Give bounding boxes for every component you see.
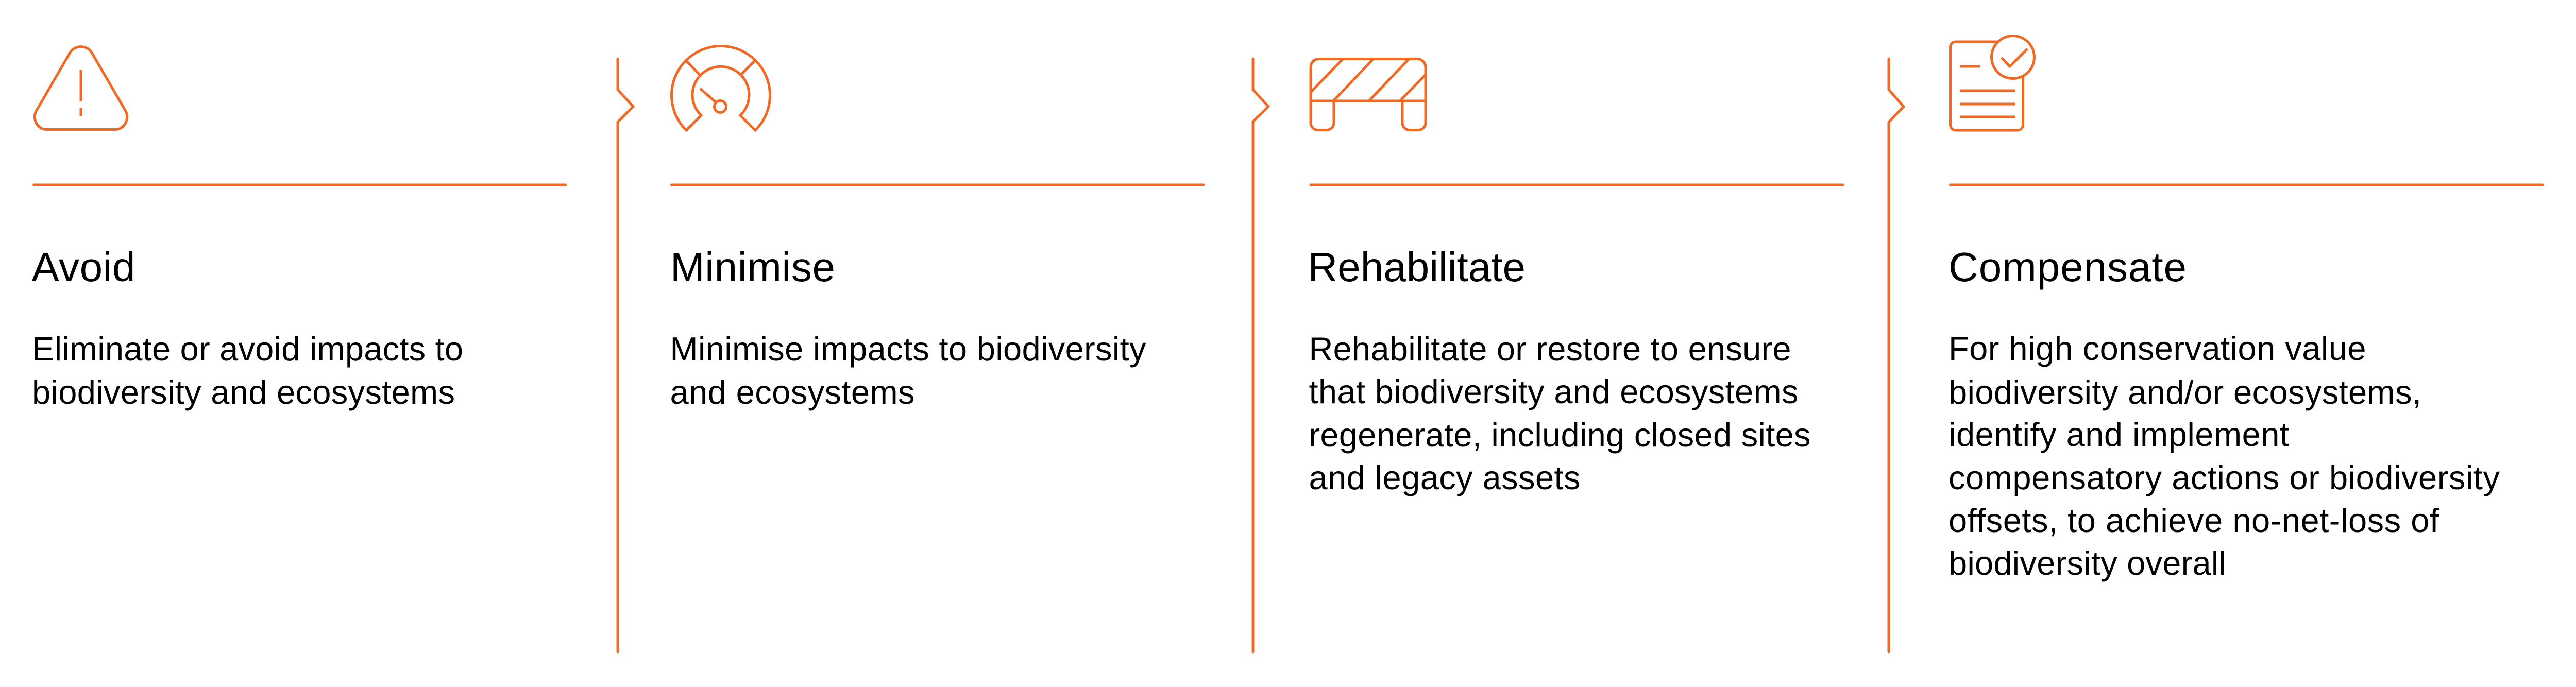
text: Minimise description: and ecosystems bbox=[670, 373, 915, 411]
text: Rehabilitate description: regenerate, including closed sites bbox=[1309, 416, 1810, 454]
icon: warning triangle bbox=[35, 47, 127, 130]
text: Compensate description: For high conservation value bbox=[1948, 330, 2366, 367]
rule: Avoid bbox=[34, 183, 566, 186]
text: Rehabilitate description bbox=[1309, 330, 1810, 496]
text: Compensate description: compensatory actions or biodiversity bbox=[1948, 459, 2500, 496]
text: Rehabilitate description: that biodiversity and ecosystems bbox=[1309, 373, 1798, 410]
arrow: divider 1 bbox=[618, 59, 633, 652]
heading: Minimise: Minimise bbox=[670, 244, 835, 290]
text: Compensate description: offsets, to achieve no-net-loss of bbox=[1948, 502, 2439, 539]
icon: document with check mark bbox=[1951, 36, 2034, 130]
text: Minimise description bbox=[670, 330, 1146, 411]
arrow: divider 3 bbox=[1889, 59, 1904, 652]
text: Avoid description: Eliminate or avoid impacts to bbox=[32, 330, 463, 368]
text: Minimise description: Minimise impacts to biodiversity bbox=[670, 330, 1146, 368]
text: Compensate description: biodiversity and/or ecosystems, bbox=[1948, 373, 2421, 411]
rule: Compensate bbox=[1951, 183, 2543, 186]
heading: Avoid: Avoid bbox=[32, 244, 135, 290]
arrow: divider 2 bbox=[1253, 59, 1268, 652]
text: Compensate description bbox=[1948, 330, 2500, 582]
panel: Rehabilitate bbox=[1308, 59, 1843, 496]
text: Rehabilitate description: and legacy assets bbox=[1309, 459, 1581, 496]
rule: Rehabilitate bbox=[1311, 183, 1843, 186]
rule: Minimise bbox=[672, 183, 1204, 186]
panel: Minimise bbox=[670, 46, 1204, 411]
text: Avoid description bbox=[32, 330, 463, 411]
icon: speedometer gauge bbox=[672, 46, 770, 130]
heading: Rehabilitate: Rehabilitate bbox=[1308, 244, 1526, 290]
panel: Compensate bbox=[1948, 36, 2543, 582]
panel: Avoid bbox=[32, 47, 566, 411]
icon: road barrier bbox=[1311, 59, 1426, 130]
text: Rehabilitate description: Rehabilitate or restore to ensure bbox=[1309, 330, 1791, 368]
heading: Compensate: Compensate bbox=[1948, 244, 2187, 290]
text: Avoid description: biodiversity and ecosystems bbox=[32, 373, 455, 411]
text: Compensate description: biodiversity overall bbox=[1948, 544, 2226, 582]
text: Compensate description: identify and implement bbox=[1948, 416, 2289, 453]
